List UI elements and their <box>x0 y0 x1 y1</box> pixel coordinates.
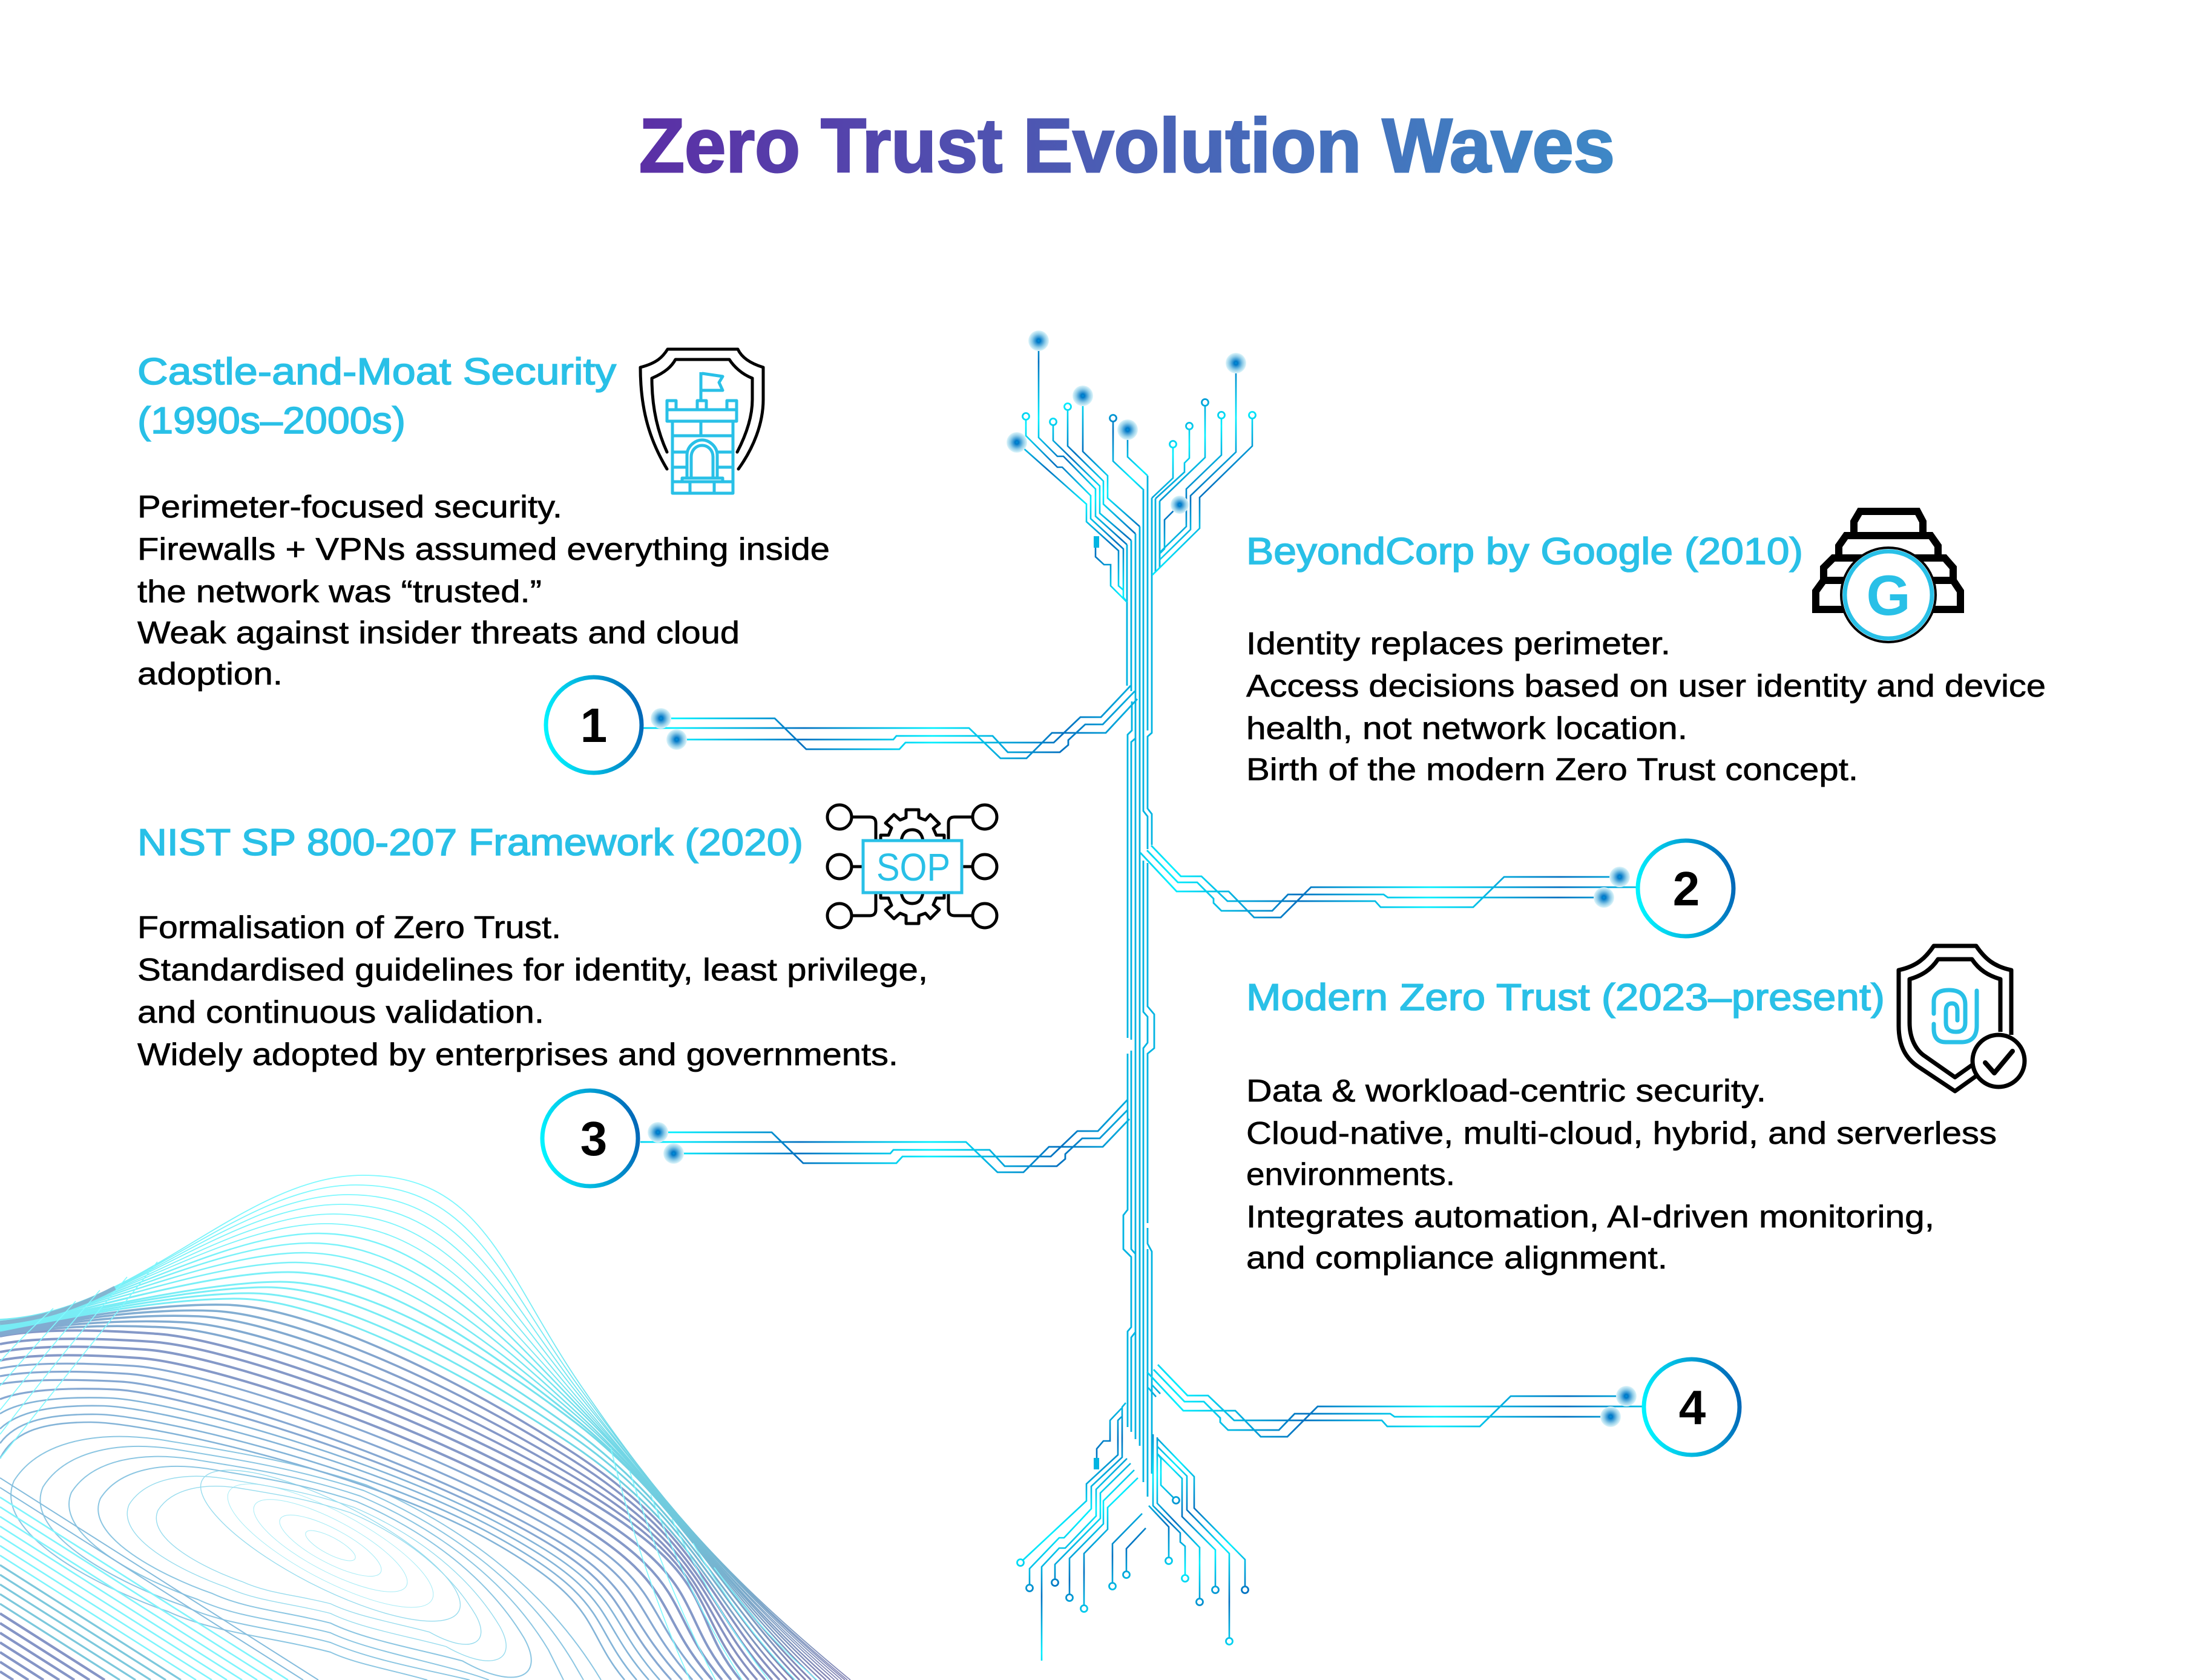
body text: Birth of the modern Zero Trust concept. <box>1246 752 1858 787</box>
step number badge 4 <box>1644 1359 1740 1455</box>
circuit tree: bottom roots <box>1017 1385 1248 1661</box>
connector 1: trunk to step 1 <box>643 686 1137 758</box>
icon: fingerprint shield with check <box>1899 946 2025 1091</box>
body text: Cloud-native, multi-cloud, hybrid, and serverless <box>1246 1116 1997 1151</box>
panel: Modern Zero Trust <box>1246 946 2025 1276</box>
step number badge 1 <box>546 677 642 773</box>
panel: BeyondCorp by Google <box>1246 511 2046 787</box>
icon: castle shield <box>640 349 763 493</box>
body text: health, not network location. <box>1246 711 1687 746</box>
heading: Castle-and-Moat Security <box>137 351 616 393</box>
heading <box>137 351 616 442</box>
body text: environments. <box>1246 1157 1455 1192</box>
body text <box>1246 626 2046 787</box>
body text <box>137 910 928 1072</box>
body text: Widely adopted by enterprises and governments. <box>137 1037 898 1072</box>
decorative wave contour graphic <box>0 1175 850 1680</box>
body text: adoption. <box>137 657 283 692</box>
icon: Google brick stack <box>1816 511 1960 642</box>
body text: and compliance alignment. <box>1246 1241 1667 1276</box>
icon: Google brick stack: G <box>1866 563 1911 627</box>
step number badge 3: 3 <box>580 1112 607 1166</box>
body text: and continuous validation. <box>137 995 544 1030</box>
circuit tree: top branches <box>1007 330 1255 602</box>
icon: SOP gear chip: SOP <box>876 845 950 889</box>
connector 4: trunk to step 4 <box>1147 1365 1643 1437</box>
body text: Firewalls + VPNs assumed everything inside <box>137 532 830 567</box>
panel: Castle-and-Moat Security <box>137 349 830 692</box>
body text: Weak against insider threats and cloud <box>137 615 740 651</box>
heading: Modern Zero Trust (2023–present) <box>1246 977 1885 1019</box>
heading: NIST SP 800-207 Framework (2020) <box>137 822 803 864</box>
step number badge 1: 1 <box>580 698 607 752</box>
body text: Data & workload-centric security. <box>1246 1074 1766 1109</box>
step number badge 4: 4 <box>1679 1380 1706 1434</box>
body text: the network was “trusted.” <box>137 574 542 609</box>
icon: SOP gear chip <box>827 805 997 928</box>
circuit tree: central trunk <box>1123 476 1160 1497</box>
body text: Access decisions based on user identity and device <box>1246 669 2046 704</box>
step number badge 2: 2 <box>1673 862 1700 916</box>
connector 3: trunk to step 3 <box>640 1100 1129 1172</box>
body text <box>1246 1074 1997 1276</box>
panel: NIST SP 800-207 Framework <box>137 805 997 1072</box>
connector 2: trunk to step 2 <box>1140 845 1636 917</box>
step number badge 2 <box>1638 841 1733 936</box>
body text: Perimeter-focused security. <box>137 490 562 525</box>
heading: BeyondCorp by Google (2010) <box>1246 531 1803 573</box>
body text: Formalisation of Zero Trust. <box>137 910 561 945</box>
body text: Integrates automation, AI-driven monitoring, <box>1246 1199 1934 1235</box>
step number badge 3 <box>542 1091 638 1186</box>
body text: Standardised guidelines for identity, least privilege, <box>137 953 928 988</box>
heading: (1990s–2000s) <box>137 400 406 442</box>
body text <box>137 490 830 692</box>
body text: Identity replaces perimeter. <box>1246 626 1671 661</box>
title: Zero Trust Evolution Waves <box>639 103 1615 188</box>
